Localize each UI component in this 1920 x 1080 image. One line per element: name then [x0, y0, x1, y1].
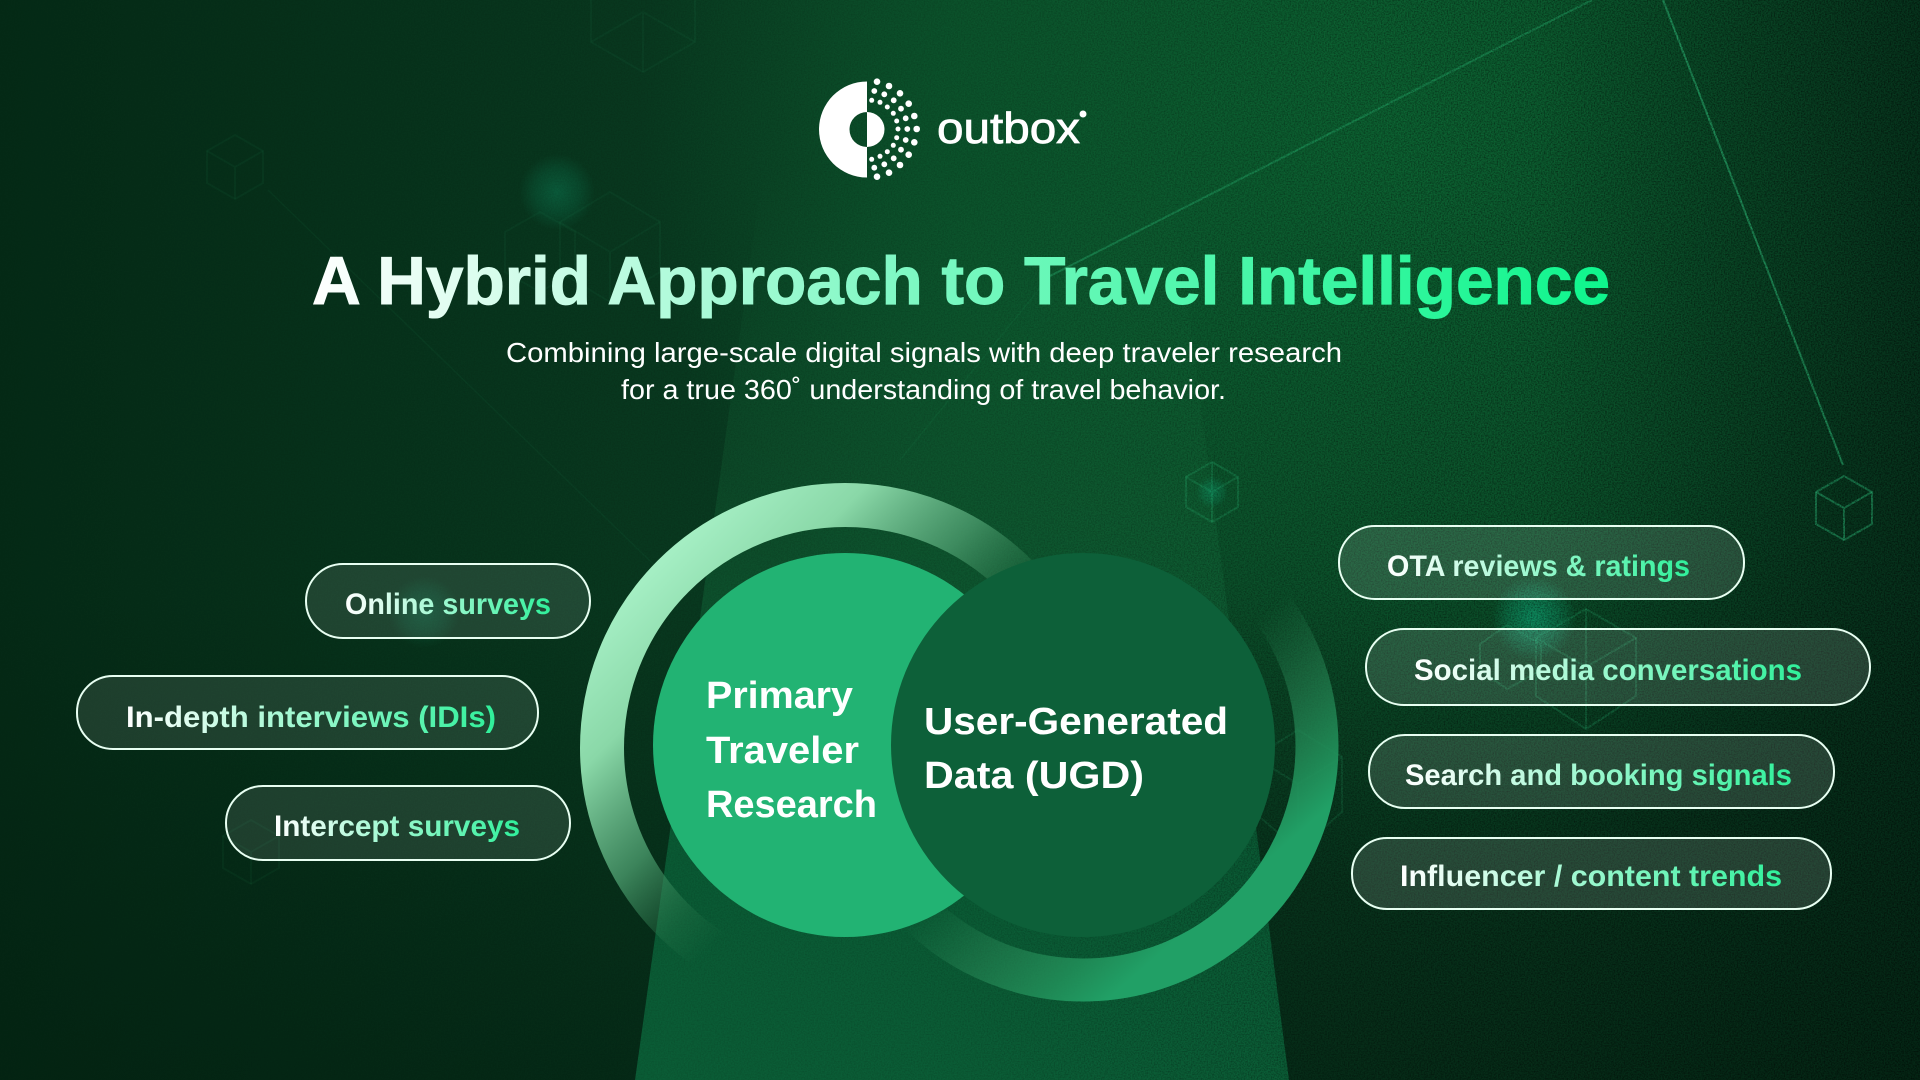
pill: influencer trends: Influencer / content trends: [1400, 860, 1782, 893]
background network of cubes: [207, 0, 1872, 884]
ring: user-generated data: [849, 512, 1317, 980]
pill: in-depth interviews: In-depth interviews (IDIs): [126, 701, 496, 734]
circle: user-generated data: Data (UGD): [924, 755, 1144, 797]
logo wordmark: outbox: [937, 104, 1080, 153]
icon: half disc with dots: [819, 78, 920, 180]
subtitle: for a true 360˚ understanding of travel behavior.: [621, 374, 1226, 405]
circle: user-generated data: User-Generated: [924, 701, 1228, 743]
pill: social media: [1366, 629, 1870, 705]
pill: intercept surveys: Intercept surveys: [274, 810, 520, 843]
pill: search and booking: Search and booking signals: [1405, 759, 1792, 792]
pill: in-depth interviews: [77, 676, 538, 749]
circle: user-generated data: [891, 553, 1275, 937]
background light beam: [635, 170, 1289, 1080]
pill: OTA reviews: OTA reviews & ratings: [1387, 550, 1690, 583]
title: A Hybrid Approach to Travel Intelligence: [312, 243, 1610, 319]
circle: primary traveler research: [653, 553, 1037, 937]
circle: primary traveler research: Primary: [706, 675, 853, 717]
venn diagram: [602, 505, 1317, 991]
pill: search and booking: [1369, 735, 1834, 808]
subtitle: Combining large-scale digital signals with deep traveler research: [506, 337, 1342, 368]
pill: OTA reviews: [1339, 526, 1744, 599]
pill: influencer trends: [1352, 838, 1831, 909]
circle: primary traveler research: Research: [706, 784, 877, 826]
left pills: primary research methods: [77, 564, 590, 860]
ring: primary research: [602, 505, 1088, 991]
subtitle: [506, 337, 1342, 405]
brand logo: outbox: [819, 78, 1086, 180]
right pills: user-generated data sources: [1339, 526, 1870, 909]
circle: primary traveler research: Traveler: [706, 730, 859, 772]
pill: online surveys: Online surveys: [345, 588, 551, 621]
pill: online surveys: [306, 564, 590, 638]
pill: intercept surveys: [226, 786, 570, 860]
pill: social media: Social media conversations: [1414, 654, 1802, 687]
